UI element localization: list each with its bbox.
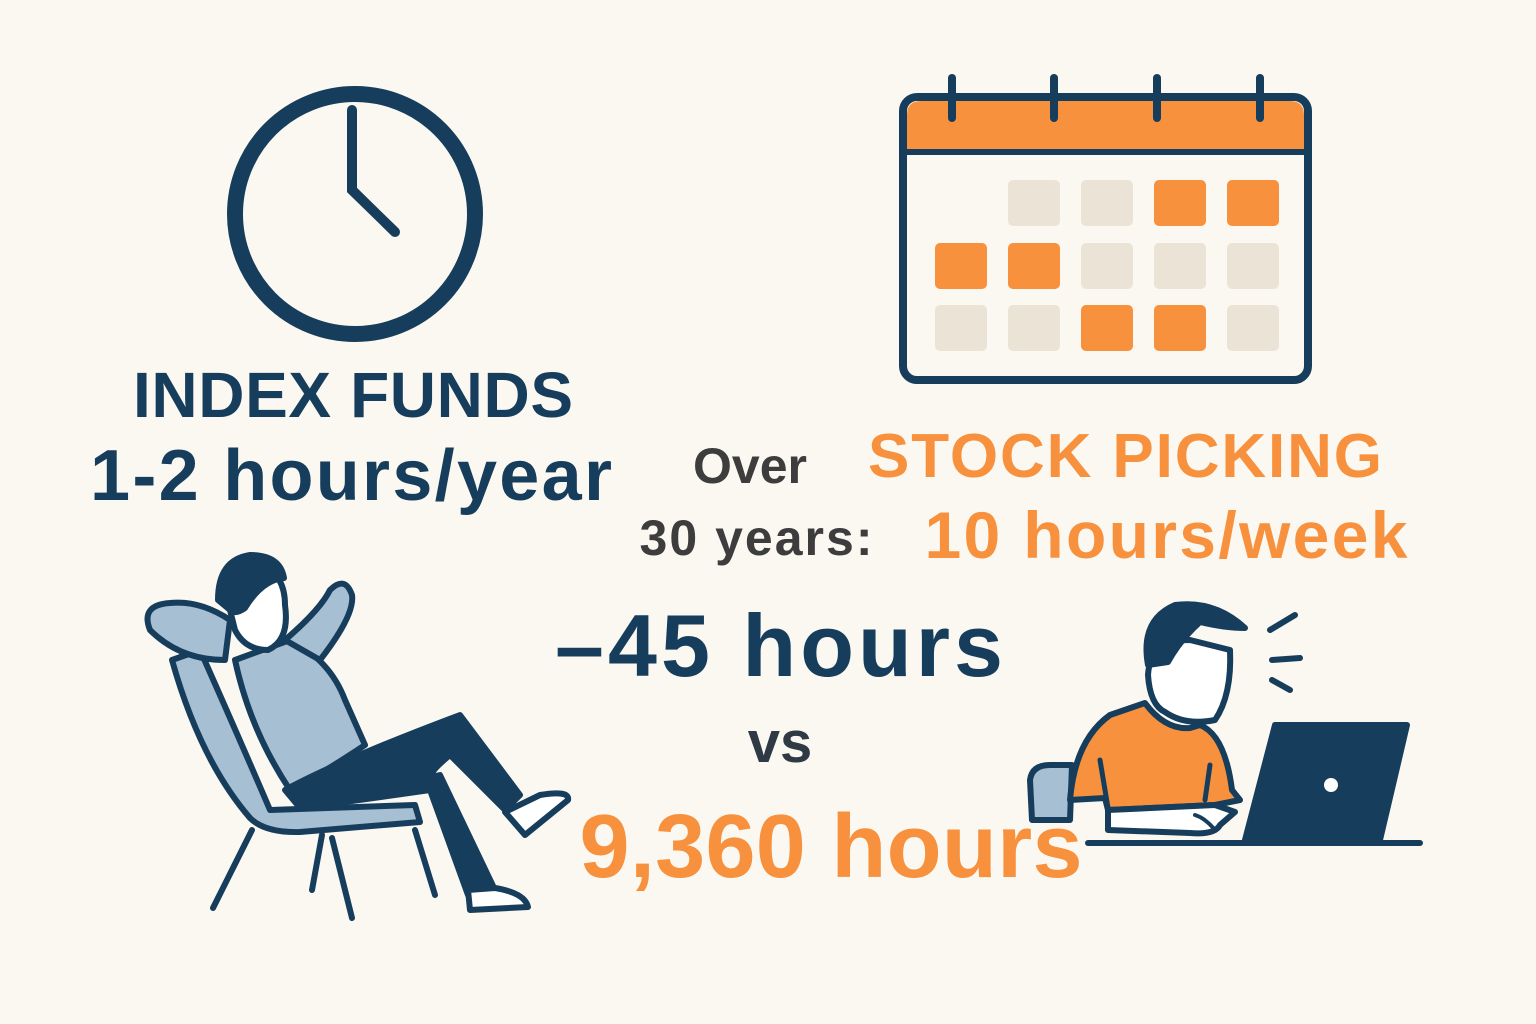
text: 9,360 hours: 9,360 hours <box>580 797 1082 897</box>
heading: index funds: INDEX FUNDS <box>133 359 573 431</box>
illustration: stressed person at laptop <box>1030 604 1420 843</box>
icon: calendar <box>903 78 1308 380</box>
icon: clock <box>235 94 475 334</box>
text: 1-2 hours/year: 1-2 hours/year <box>90 436 612 516</box>
text: ~45 hours: –45 hours <box>555 596 1003 695</box>
text: 10 hours/week: 10 hours/week <box>924 498 1408 572</box>
heading: stock picking: STOCK PICKING <box>868 422 1382 491</box>
text: over 30 years <box>640 438 872 566</box>
text: over 30 years: 30 years: <box>640 510 872 566</box>
text: over 30 years: Over <box>693 438 807 494</box>
illustration: relaxed person in chair <box>148 555 568 918</box>
text: vs: vs <box>748 710 812 775</box>
